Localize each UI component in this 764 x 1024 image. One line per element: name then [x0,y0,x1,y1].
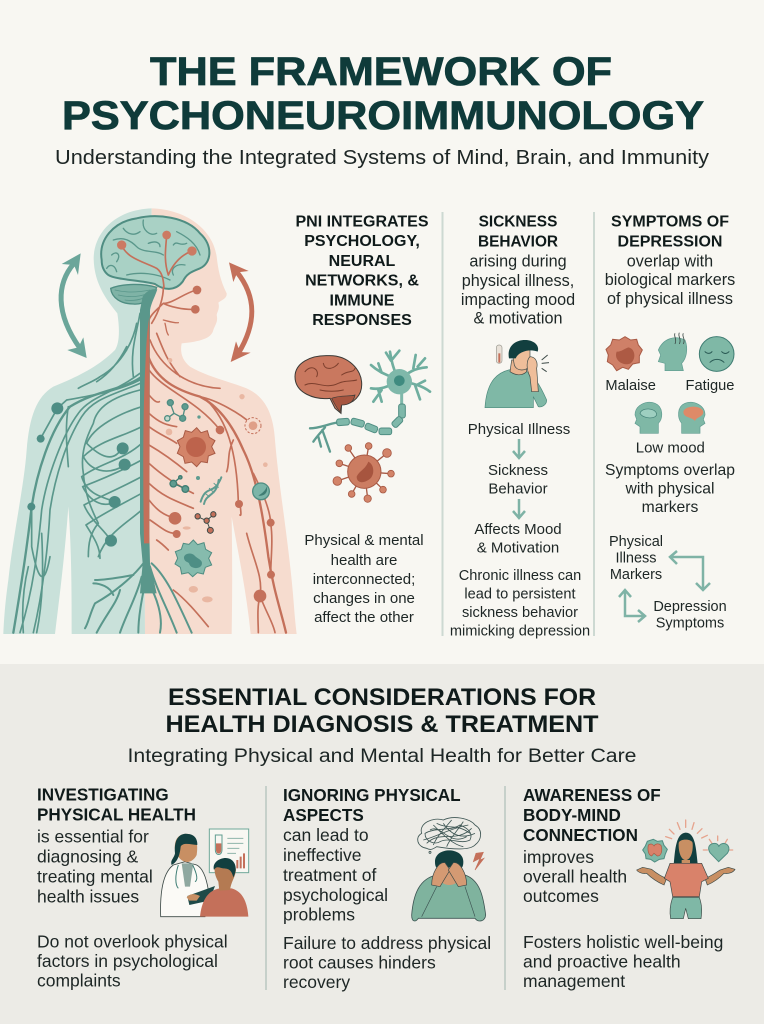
immune cell: teal spiky [175,540,212,577]
heading text: PHYSICAL HEALTH [37,806,196,824]
panel: symptoms of depression [605,214,735,632]
flow: sickness behavior chain: Affects Mood [474,521,562,538]
text: interconnected: affect the other [314,609,414,626]
text: interconnected: changes in one [313,590,415,607]
text: symptoms overlap: Symptoms overlap [605,462,735,479]
nodes: red [169,286,275,602]
icon: head with tangled brain [635,402,662,433]
heading: symptoms of depression: biological markers [605,271,735,289]
text: low mood: Low mood [636,439,705,456]
brain [101,216,209,304]
heading: PNI integrates: IMMUNE [330,292,395,309]
panel: sickness behavior [450,214,590,640]
title [62,50,704,138]
text: chronic illness: Chronic illness can [459,568,581,584]
text: fatigue: Fatigue [686,378,734,394]
heading text: overall health [523,866,627,886]
heading: sickness behavior: physical illness, [462,272,574,290]
icon group: brain neuron virus [295,351,430,502]
heading: PNI integrates: PNI INTEGRATES [295,214,429,230]
flow: sickness behavior chain: & Motivation [477,540,559,556]
heading text: ASPECTS [283,806,364,825]
flow: sickness behavior chain: Sickness [488,462,548,479]
heading: symptoms of depression: overlap with [627,252,713,270]
text: depression symptoms: Symptoms [656,616,724,632]
icon: head with red brain [679,402,705,433]
text: depression symptoms: Depression [653,599,727,615]
text: fosters holistic: Fosters holistic well-being [523,932,723,952]
heading text: problems [283,904,355,924]
flow: sickness behavior chain [468,421,570,556]
heading text: INVESTIGATING [37,786,169,804]
heading text: CONNECTION [523,826,638,845]
heading: sickness behavior: & motivation [473,309,563,327]
heading text: IGNORING PHYSICAL [283,786,461,805]
panel: essential considerations [0,664,764,1024]
dna strand [201,477,221,504]
text: malaise: Malaise [605,378,656,394]
flow: sickness behavior chain: Behavior [488,480,548,498]
heading: PNI integrates: PSYCHOLOGY, [304,233,420,250]
text: symptoms overlap: with physical [625,480,714,498]
icon: balanced person [637,820,735,919]
heading: sickness behavior: impacting mood [461,291,575,309]
heading text: psychological [283,885,388,905]
heading text: improves [523,847,594,867]
heading: essential considerations: ESSENTIAL CONSIDERATIONS FOR [168,684,596,711]
heading text: can lead to [283,825,369,845]
icon: distressed person [412,818,486,921]
text: interconnected: interconnected; [313,571,415,588]
arrow: to physical markers [670,551,710,590]
heading: sickness behavior: BEHAVIOR [478,234,558,250]
text: fosters holistic: and proactive health [523,952,681,972]
title: THE FRAMEWORK OF [150,50,612,94]
arrow: to depression symptoms [619,590,645,622]
molecule: mid teal [170,476,200,492]
text: chronic illness: mimicking depression [450,624,590,640]
icon: malaise [606,337,642,371]
text: physical illness markers: Illness [615,550,657,566]
heading: symptoms of depression: of physical illness [607,290,733,308]
flow: sickness behavior chain: Physical Illness [468,421,570,438]
heading: symptoms of depression: DEPRESSION [618,234,722,250]
heading text: is essential for [37,826,149,846]
text: failure to address: root causes hinders [283,952,436,972]
text: symptoms overlap: markers [642,499,698,516]
icon: fatigue head [658,333,687,371]
text: do not overlook: factors in psychological [37,951,218,971]
icon: sad face [699,337,734,371]
brainstem and spine [140,289,157,593]
heading text: diagnosing & [37,846,139,866]
nerves: red right [148,287,286,633]
heading text: BODY-MIND [523,806,621,825]
heading text: AWARENESS OF [523,786,661,805]
heading: symptoms of depression: SYMPTOMS OF [611,214,729,230]
column: ignoring physical aspects [283,786,491,992]
text: interconnected: Physical & mental [304,532,424,549]
arrow: teal cycle [61,253,87,358]
body illustration [3,208,297,634]
teal cell right [253,483,269,500]
heading text: ineffective [283,845,361,865]
icon: brain [295,356,362,413]
small cell: outlined [245,418,261,434]
text: do not overlook: Do not overlook physical [37,932,228,952]
heading text: treatment of [283,865,377,885]
arrow [513,439,525,458]
heading: PNI integrates: NEURAL [329,253,396,270]
icon: doctor and patient [161,829,249,917]
body: peach right half [144,208,297,634]
nodes: teal [27,402,131,547]
subtitle: Understanding the Integrated Systems of Mind, Brain, and Immunity [55,147,709,169]
text: physical illness markers: Physical [609,534,663,550]
heading: sickness behavior: SICKNESS [479,214,557,230]
text: fosters holistic: management [523,971,625,991]
heading: PNI integrates: RESPONSES [312,312,412,329]
heading: sickness behavior: arising during [469,252,567,270]
text: chronic illness: sickness behavior [462,605,578,621]
title: PSYCHONEUROIMMUNOLOGY [62,94,704,138]
panel: PNI integrates [295,214,430,626]
text: do not overlook: complaints [37,970,121,990]
column: investigating physical health [37,786,249,990]
icon: neuron [310,351,430,452]
arrow: red cycle [229,262,252,362]
heading: essential considerations [166,684,599,738]
text: failure to address: recovery [283,972,350,992]
molecule: top teal [165,400,201,421]
heading: PNI integrates: NETWORKS, & [305,273,419,290]
text: physical illness markers: Markers [610,567,662,583]
text: chronic illness: lead to persistent [464,586,576,602]
molecule: lower red [195,512,216,533]
body: teal left half [3,208,152,634]
text: interconnected: health are [331,552,397,569]
heading text: health issues [37,886,139,906]
nerves: teal left [13,313,192,633]
icon: virus [333,443,394,502]
subheading: Integrating Physical and Mental Health for Better Care [128,746,636,767]
divider [442,212,594,636]
icons: symptoms [605,333,734,456]
heading text: treating mental [37,866,153,886]
icon: sick person [485,340,549,408]
text: failure to address: Failure to address physical [283,933,491,953]
column: awareness of body-mind connection [523,786,735,991]
heading text: outcomes [523,886,599,906]
heading: essential considerations: HEALTH DIAGNOSIS & TREATMENT [166,711,599,738]
arrow [513,499,525,518]
immune cell: red spiky [177,428,215,467]
